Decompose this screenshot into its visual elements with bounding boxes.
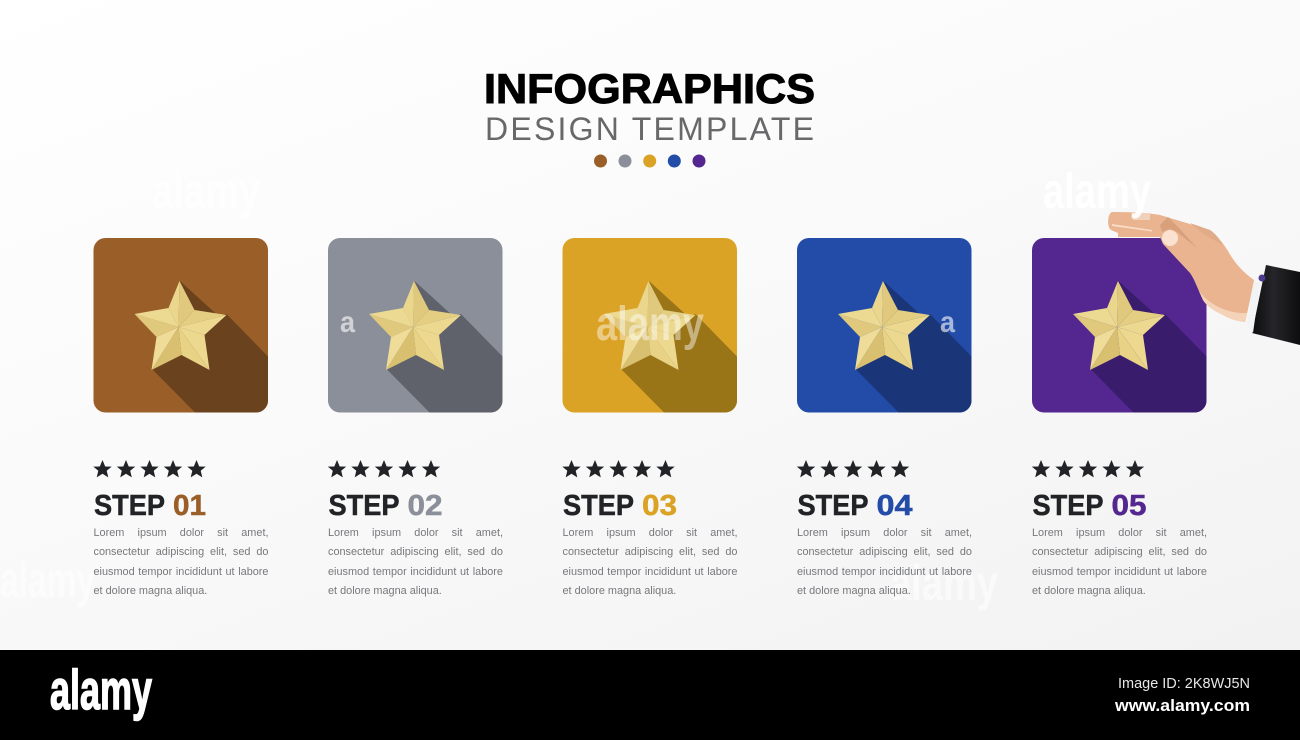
text block: step 4: et dolore magna aliqua. <box>797 585 911 597</box>
text block: step 5: Lorem ipsum dolor sit amet, <box>1032 527 1207 539</box>
heading: step 2 <box>328 490 442 522</box>
heading: step 2: STEP <box>328 490 400 522</box>
watermark: centre alamy: alamy <box>596 298 704 351</box>
panel: step 4 star tile <box>797 238 973 414</box>
text block: step 1: et dolore magna aliqua. <box>94 585 207 597</box>
heading: step 1 <box>94 490 206 522</box>
text block: step 2: eiusmod tempor incididunt ut labore <box>328 566 503 578</box>
footer logo: alamy <box>50 658 152 721</box>
text block: step 4: Lorem ipsum dolor sit amet, <box>797 527 972 539</box>
panel: step 2 star tile <box>328 238 504 414</box>
text block: step 2: consectetur adipiscing elit, sed do <box>328 546 503 558</box>
watermark: lower right alamy: alamy <box>890 555 998 611</box>
text block: step 1 <box>94 527 268 597</box>
heading: step 2: 02 <box>408 490 442 522</box>
watermark: upper left alamy: alamy <box>152 163 260 219</box>
text block: step 3 <box>562 527 738 597</box>
heading: step 5 <box>1032 490 1146 522</box>
watermark: tile a left: a <box>340 306 355 339</box>
text block: step 5: consectetur adipiscing elit, sed do <box>1032 546 1207 558</box>
heading: step 1: 01 <box>173 490 206 522</box>
panel: step 5 star tile <box>1032 238 1208 414</box>
text block: step 1: Lorem ipsum dolor sit amet, <box>94 527 268 539</box>
footer image id: Image ID: 2K8WJ5N <box>1118 676 1250 692</box>
heading: step 4: 04 <box>876 490 912 522</box>
text block: step 4 <box>797 527 972 597</box>
text block: step 1: eiusmod tempor incididunt ut labore <box>94 566 268 578</box>
watermark: tile a right: a <box>940 306 955 339</box>
panel: step 1 star tile <box>94 238 270 414</box>
heading: step 1: STEP <box>94 490 165 522</box>
watermark: lower left alamy: alamy <box>0 552 95 608</box>
text block: step 5 <box>1032 527 1207 597</box>
text block: step 5: et dolore magna aliqua. <box>1032 585 1146 597</box>
text block: step 3: eiusmod tempor incididunt ut labore <box>562 566 738 578</box>
footer bar <box>0 650 1300 740</box>
text block: step 2: et dolore magna aliqua. <box>328 585 442 597</box>
subtitle: DESIGN TEMPLATE <box>485 111 814 147</box>
text block: step 1: consectetur adipiscing elit, sed do <box>94 546 268 558</box>
text block: step 3: Lorem ipsum dolor sit amet, <box>562 527 738 539</box>
text block: step 4: eiusmod tempor incididunt ut labore <box>797 566 972 578</box>
icon: hand holding tile <box>1108 212 1300 345</box>
heading: step 3: 03 <box>642 490 677 522</box>
text block: step 2 <box>328 527 503 597</box>
watermark: upper right alamy: alamy <box>1043 163 1151 219</box>
heading: step 5: 05 <box>1112 490 1146 522</box>
panel: step 3 star tile <box>562 238 738 414</box>
rating stars step 4 <box>797 460 909 477</box>
rating stars step 3 <box>562 460 675 477</box>
title: INFOGRAPHICS <box>484 65 815 112</box>
heading: step 3: STEP <box>563 490 634 522</box>
text block: step 2: Lorem ipsum dolor sit amet, <box>328 527 503 539</box>
text block: step 3: consectetur adipiscing elit, sed do <box>562 546 738 558</box>
text block: step 5: eiusmod tempor incididunt ut labore <box>1032 566 1207 578</box>
heading: step 5: STEP <box>1032 490 1104 522</box>
text block: step 4: consectetur adipiscing elit, sed do <box>797 546 972 558</box>
rating stars step 1 <box>93 460 206 477</box>
footer website: www.alamy.com <box>1114 697 1250 715</box>
colour dots <box>594 154 706 168</box>
rating stars step 2 <box>328 460 440 477</box>
heading: step 4 <box>798 490 912 522</box>
text block: step 3: et dolore magna aliqua. <box>562 585 676 597</box>
heading: step 4: STEP <box>798 490 868 522</box>
heading: step 3 <box>563 490 677 522</box>
rating stars step 5 <box>1032 460 1144 477</box>
